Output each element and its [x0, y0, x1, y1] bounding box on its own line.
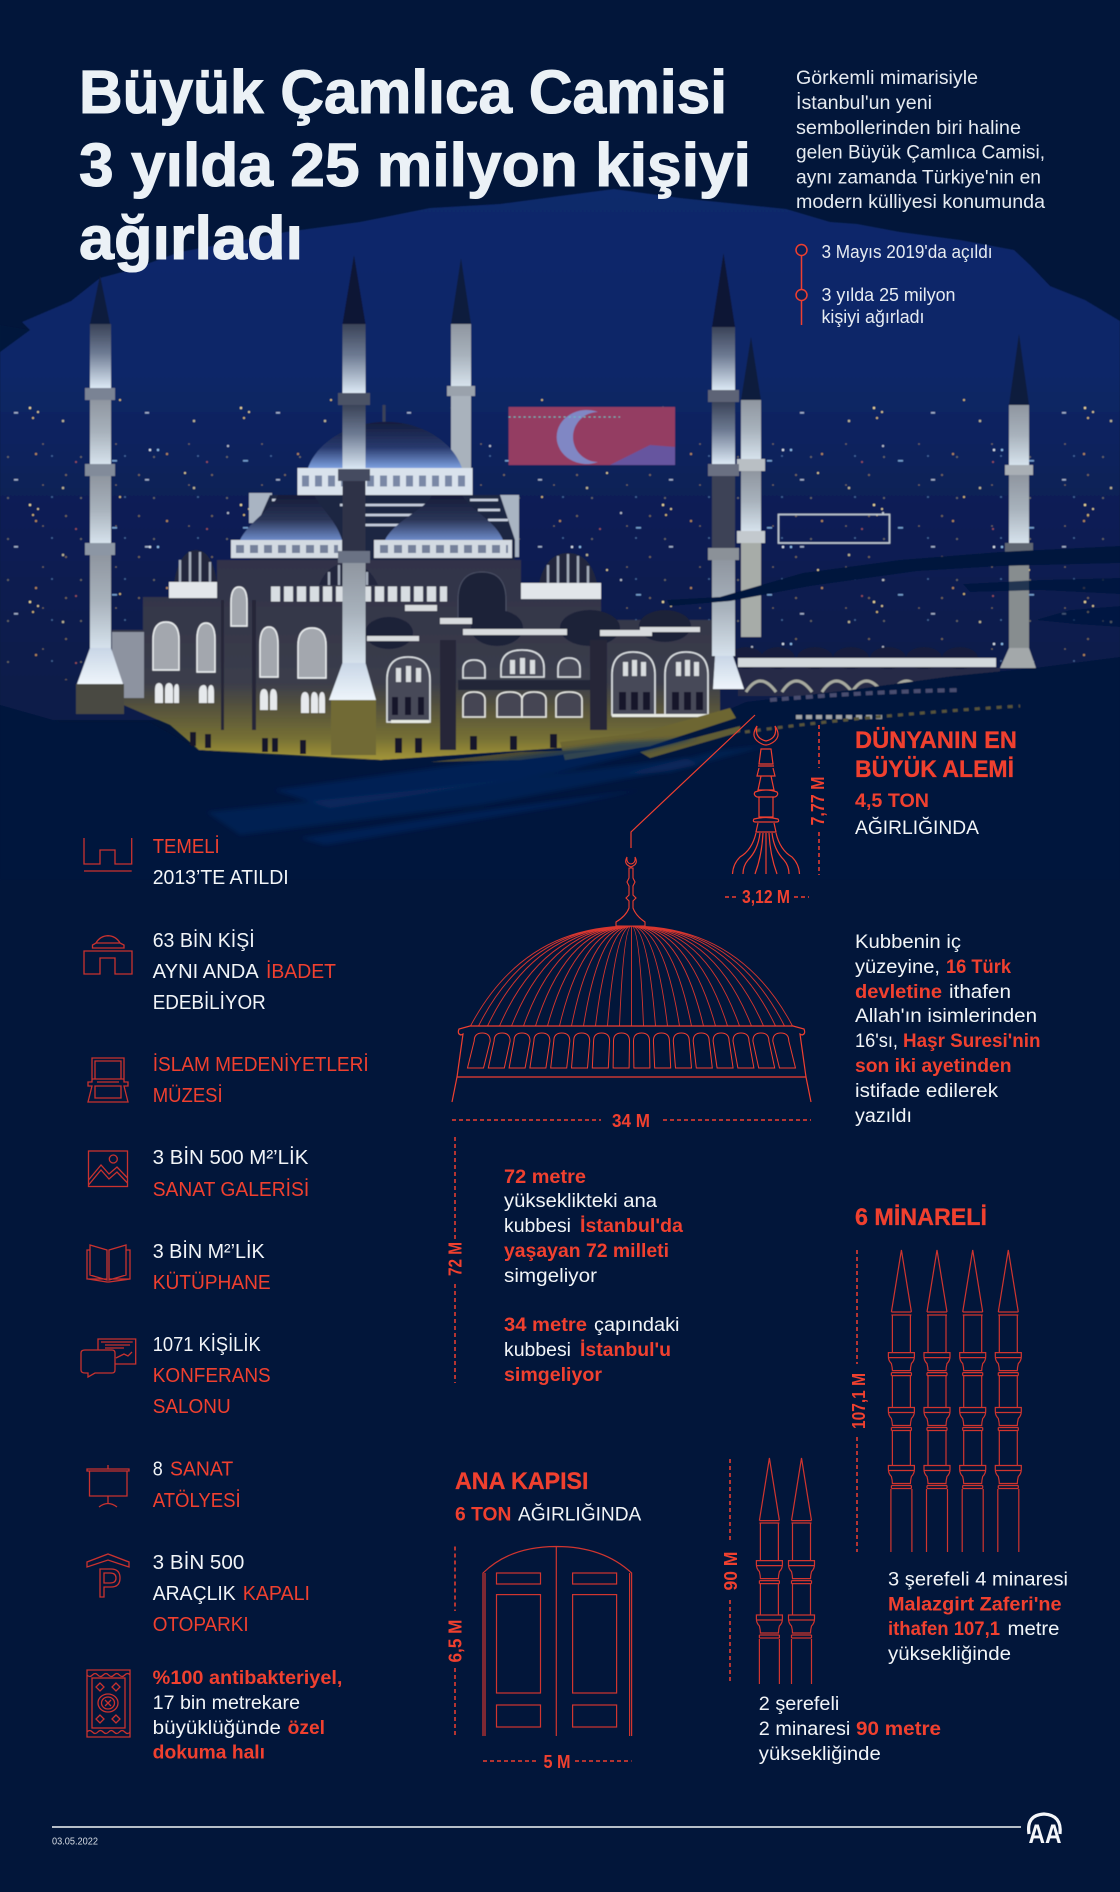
turrets: [249, 493, 519, 557]
list: art workshops: 8: [153, 1458, 163, 1480]
gate dimensions: 6,5 M: [446, 1620, 466, 1662]
text: dome symbolism: kubbesi: [504, 1216, 571, 1237]
main body: [112, 560, 720, 760]
text: four minarets: metre: [1008, 1619, 1060, 1640]
lit windows: [153, 587, 326, 678]
text: dome symbolism: simgeliyor: [504, 1365, 603, 1386]
side domes: [169, 550, 601, 599]
photo: mosque at night on brush stroke: [0, 188, 1120, 763]
text: dome inscription: 16 Türk: [946, 957, 1011, 978]
list: carpet: %100 antibakteriyel,: [153, 1668, 342, 1689]
timeline: [796, 242, 992, 327]
list: foundation: [84, 835, 289, 889]
minaret 3: [447, 258, 475, 470]
text: four minarets: 3 şerefeli 4 minaresi: [888, 1570, 1068, 1590]
list: carpet: [87, 1668, 342, 1764]
list: conference hall: KONFERANS: [153, 1365, 271, 1387]
intro paragraph: modern külliyesi konumunda: [796, 192, 1045, 213]
text: dome symbolism: 34 metre: [504, 1315, 587, 1336]
text: dome symbolism: İstanbul'da: [580, 1216, 683, 1237]
icon: projection screen: [87, 1465, 129, 1507]
dome ribs: [470, 926, 792, 1026]
list: capacity: [84, 929, 336, 1014]
reflected lights streaks: [430, 690, 1020, 762]
dark brush wisps over the sky: [0, 325, 1120, 627]
list: car park: 3 BİN 500: [153, 1551, 244, 1574]
alem heading: 4,5 TON: [855, 791, 929, 812]
text: dome inscription: istifade edilerek: [855, 1081, 999, 1102]
timeline: kişiyi ağırladı: [822, 307, 924, 327]
lit building outline: [778, 514, 890, 543]
text: two minarets: [759, 1694, 941, 1765]
four minarets drawing: [888, 1250, 1021, 1552]
dome drum: [452, 1026, 811, 1102]
minaret height dimension 90: 90 M: [721, 1552, 741, 1590]
text: dome inscription: yüzeyine,: [855, 957, 940, 978]
intro paragraph: İstanbul'un yeni: [796, 93, 932, 114]
main dome: [298, 405, 472, 495]
gate dimensions: 5 M: [544, 1752, 570, 1772]
lattice window: [458, 572, 506, 623]
dome width dimension: 34 M: [612, 1111, 650, 1131]
list: library: KÜTÜPHANE: [153, 1272, 271, 1294]
text: dome inscription: Haşr Suresi'nin: [903, 1031, 1040, 1052]
list: car park: KAPALI: [243, 1583, 310, 1605]
gate dimensions: [446, 1546, 632, 1772]
heading: main gate: AĞIRLIĞINDA: [518, 1504, 642, 1526]
left wing: [112, 632, 144, 698]
list: museum: MÜZESİ: [153, 1084, 223, 1107]
title: Büyük Çamlıca Camisi: [79, 58, 727, 126]
minaret 2: [329, 255, 376, 755]
icon: picture: [88, 1151, 128, 1186]
alem heading: AĞIRLIĞINDA: [855, 817, 979, 839]
list: art workshops: [87, 1458, 241, 1512]
icon: open book: [87, 1245, 130, 1282]
text: dome inscription: [855, 932, 1040, 1127]
logo: AA: AA: [1028, 1819, 1062, 1849]
intro paragraph: aynı zamanda Türkiye'nin en: [796, 168, 1041, 188]
alem dimensions: [725, 725, 828, 907]
alem heading: [855, 727, 1017, 839]
list: capacity: AYNI ANDA: [153, 961, 259, 983]
text: dome inscription: ithafen: [949, 982, 1011, 1003]
text: dome symbolism: [504, 1167, 683, 1386]
list: capacity: EDEBİLİYOR: [153, 991, 266, 1014]
title: [79, 58, 751, 272]
text: dome symbolism: İstanbul'u: [580, 1340, 671, 1361]
text: two minarets: 2 minaresi: [759, 1719, 850, 1740]
heading: six minarets: 6 MİNARELİ: [855, 1204, 987, 1231]
list: museum: İSLAM MEDENİYETLERİ: [153, 1053, 369, 1076]
text: dome symbolism: yaşayan 72 milleti: [504, 1241, 669, 1262]
alem heading: BÜYÜK ALEMİ: [855, 756, 1014, 783]
stepped centre: [250, 495, 515, 560]
alem heading: DÜNYANIN EN: [855, 727, 1017, 754]
dome finial: [616, 857, 645, 926]
list: library: 3 BİN M²’LİK: [153, 1240, 265, 1263]
minaret 1: [76, 275, 124, 714]
foreground minarets: [76, 253, 744, 755]
minaret height dimension 107,1: 107,1 M: [849, 1373, 869, 1429]
list: carpet: büyüklüğünde: [153, 1718, 281, 1739]
list: art workshops: ATÖLYESİ: [153, 1489, 241, 1512]
text: dome inscription: devletine: [855, 982, 942, 1003]
city lights: [0, 395, 1120, 680]
small lower domes: [365, 610, 691, 649]
text: dome symbolism: simgeliyor: [504, 1266, 598, 1287]
icon: mosque: [84, 936, 132, 974]
timeline: 3 yılda 25 milyon: [822, 285, 956, 305]
text: dome symbolism: kubbesi: [504, 1340, 571, 1361]
icon: museum display: [88, 1058, 128, 1102]
flag screen: [509, 407, 675, 465]
text: dome inscription: Kubbenin iç: [855, 932, 961, 953]
list: carpet: dokuma halı: [153, 1743, 265, 1764]
text: dome inscription: yazıldı: [855, 1106, 912, 1127]
text: two minarets: 2 şerefeli: [759, 1694, 839, 1715]
text: dome symbolism: yükseklikteki ana: [504, 1191, 657, 1212]
minaret 5: [737, 337, 765, 637]
vertical piers: [221, 600, 607, 750]
list: foundation: 2013’TE ATILDI: [153, 867, 289, 889]
list: carpet: özel: [288, 1718, 325, 1739]
heading: main gate: 6 TON: [455, 1505, 511, 1526]
icon: parking: [87, 1554, 129, 1597]
list: museum: [88, 1053, 369, 1107]
list: carpet: 17 bin metrekare: [153, 1693, 300, 1714]
icon: foundation: [84, 838, 132, 871]
list: conference hall: [81, 1333, 271, 1418]
title: ağırladı: [79, 204, 303, 272]
date: 03.05.2022: [52, 1836, 98, 1847]
arched facade panels: [387, 650, 708, 722]
intro paragraph: sembollerinden biri haline: [796, 118, 1021, 139]
minaret 6: [1000, 334, 1036, 668]
list: car park: ARAÇLIK: [153, 1583, 236, 1605]
text: two minarets: yüksekliğinde: [759, 1744, 881, 1765]
list: gallery: SANAT GALERİSİ: [153, 1178, 309, 1201]
alem dimensions: 7,77 M: [808, 776, 828, 826]
colonnade right wing: [729, 647, 1000, 696]
text: dome symbolism: çapındaki: [594, 1315, 680, 1336]
dome drawing: [452, 857, 811, 1102]
text: dome symbolism: 72 metre: [504, 1167, 586, 1188]
list: library: [87, 1240, 271, 1294]
text: two minarets: 90 metre: [856, 1719, 941, 1740]
timeline: 3 Mayıs 2019'da açıldı: [822, 242, 992, 262]
dome height dimension: 72 M: [446, 1242, 466, 1276]
blue brush streaks: [207, 738, 770, 845]
brush stroke sky: [0, 189, 1120, 720]
background minarets: [447, 258, 1036, 668]
list: car park: OTOPARKI: [153, 1614, 249, 1636]
list: art workshops: SANAT: [170, 1458, 233, 1480]
text: four minarets: Malazgirt Zaferi'ne: [888, 1594, 1062, 1616]
gate drawing: [483, 1546, 632, 1736]
text: dome inscription: Allah'ın isimlerinden: [855, 1006, 1037, 1027]
list: foundation: TEMELİ: [153, 835, 220, 858]
list: gallery: 3 BİN 500 M²’LİK: [153, 1146, 309, 1169]
list: gallery: [88, 1146, 309, 1201]
alem drawing: [732, 726, 800, 874]
connector from dome finial to alem: [631, 715, 755, 848]
lower dark brush edge: [0, 657, 1120, 880]
drum windows: [468, 1033, 796, 1068]
icon: speech bubble and screen: [81, 1339, 136, 1377]
list: conference hall: SALONU: [153, 1396, 231, 1418]
heading: main gate: [455, 1468, 642, 1526]
list: car park: [87, 1551, 310, 1636]
heading: main gate: ANA KAPISI: [455, 1468, 588, 1495]
text: four minarets: ithafen 107,1: [888, 1619, 1000, 1640]
text: four minarets: yüksekliğinde: [888, 1644, 1011, 1665]
list: capacity: 63 BİN KİŞİ: [153, 929, 255, 952]
text: four minarets: [888, 1570, 1068, 1665]
intro paragraph: [796, 68, 1045, 213]
half domes: [231, 495, 512, 558]
awning and lower arcade: [458, 680, 599, 690]
balustrade: [271, 586, 447, 602]
text: dome inscription: 16'sı,: [855, 1031, 898, 1052]
minaret 4: [708, 253, 744, 689]
text: dome inscription: son iki ayetinden: [855, 1056, 1012, 1077]
title: 3 yılda 25 milyon kişiyi: [79, 131, 751, 199]
list: capacity: İBADET: [266, 960, 336, 983]
footer line: [52, 1826, 1021, 1828]
intro paragraph: gelen Büyük Çamlıca Camisi,: [796, 143, 1045, 164]
intro paragraph: Görkemli mimarisiyle: [796, 68, 978, 89]
alem dimensions: 3,12 M: [742, 887, 790, 907]
list: conference hall: 1071 KİŞİLİK: [153, 1333, 261, 1356]
icon: carpet: [87, 1670, 130, 1737]
two minarets drawing: [756, 1458, 814, 1684]
